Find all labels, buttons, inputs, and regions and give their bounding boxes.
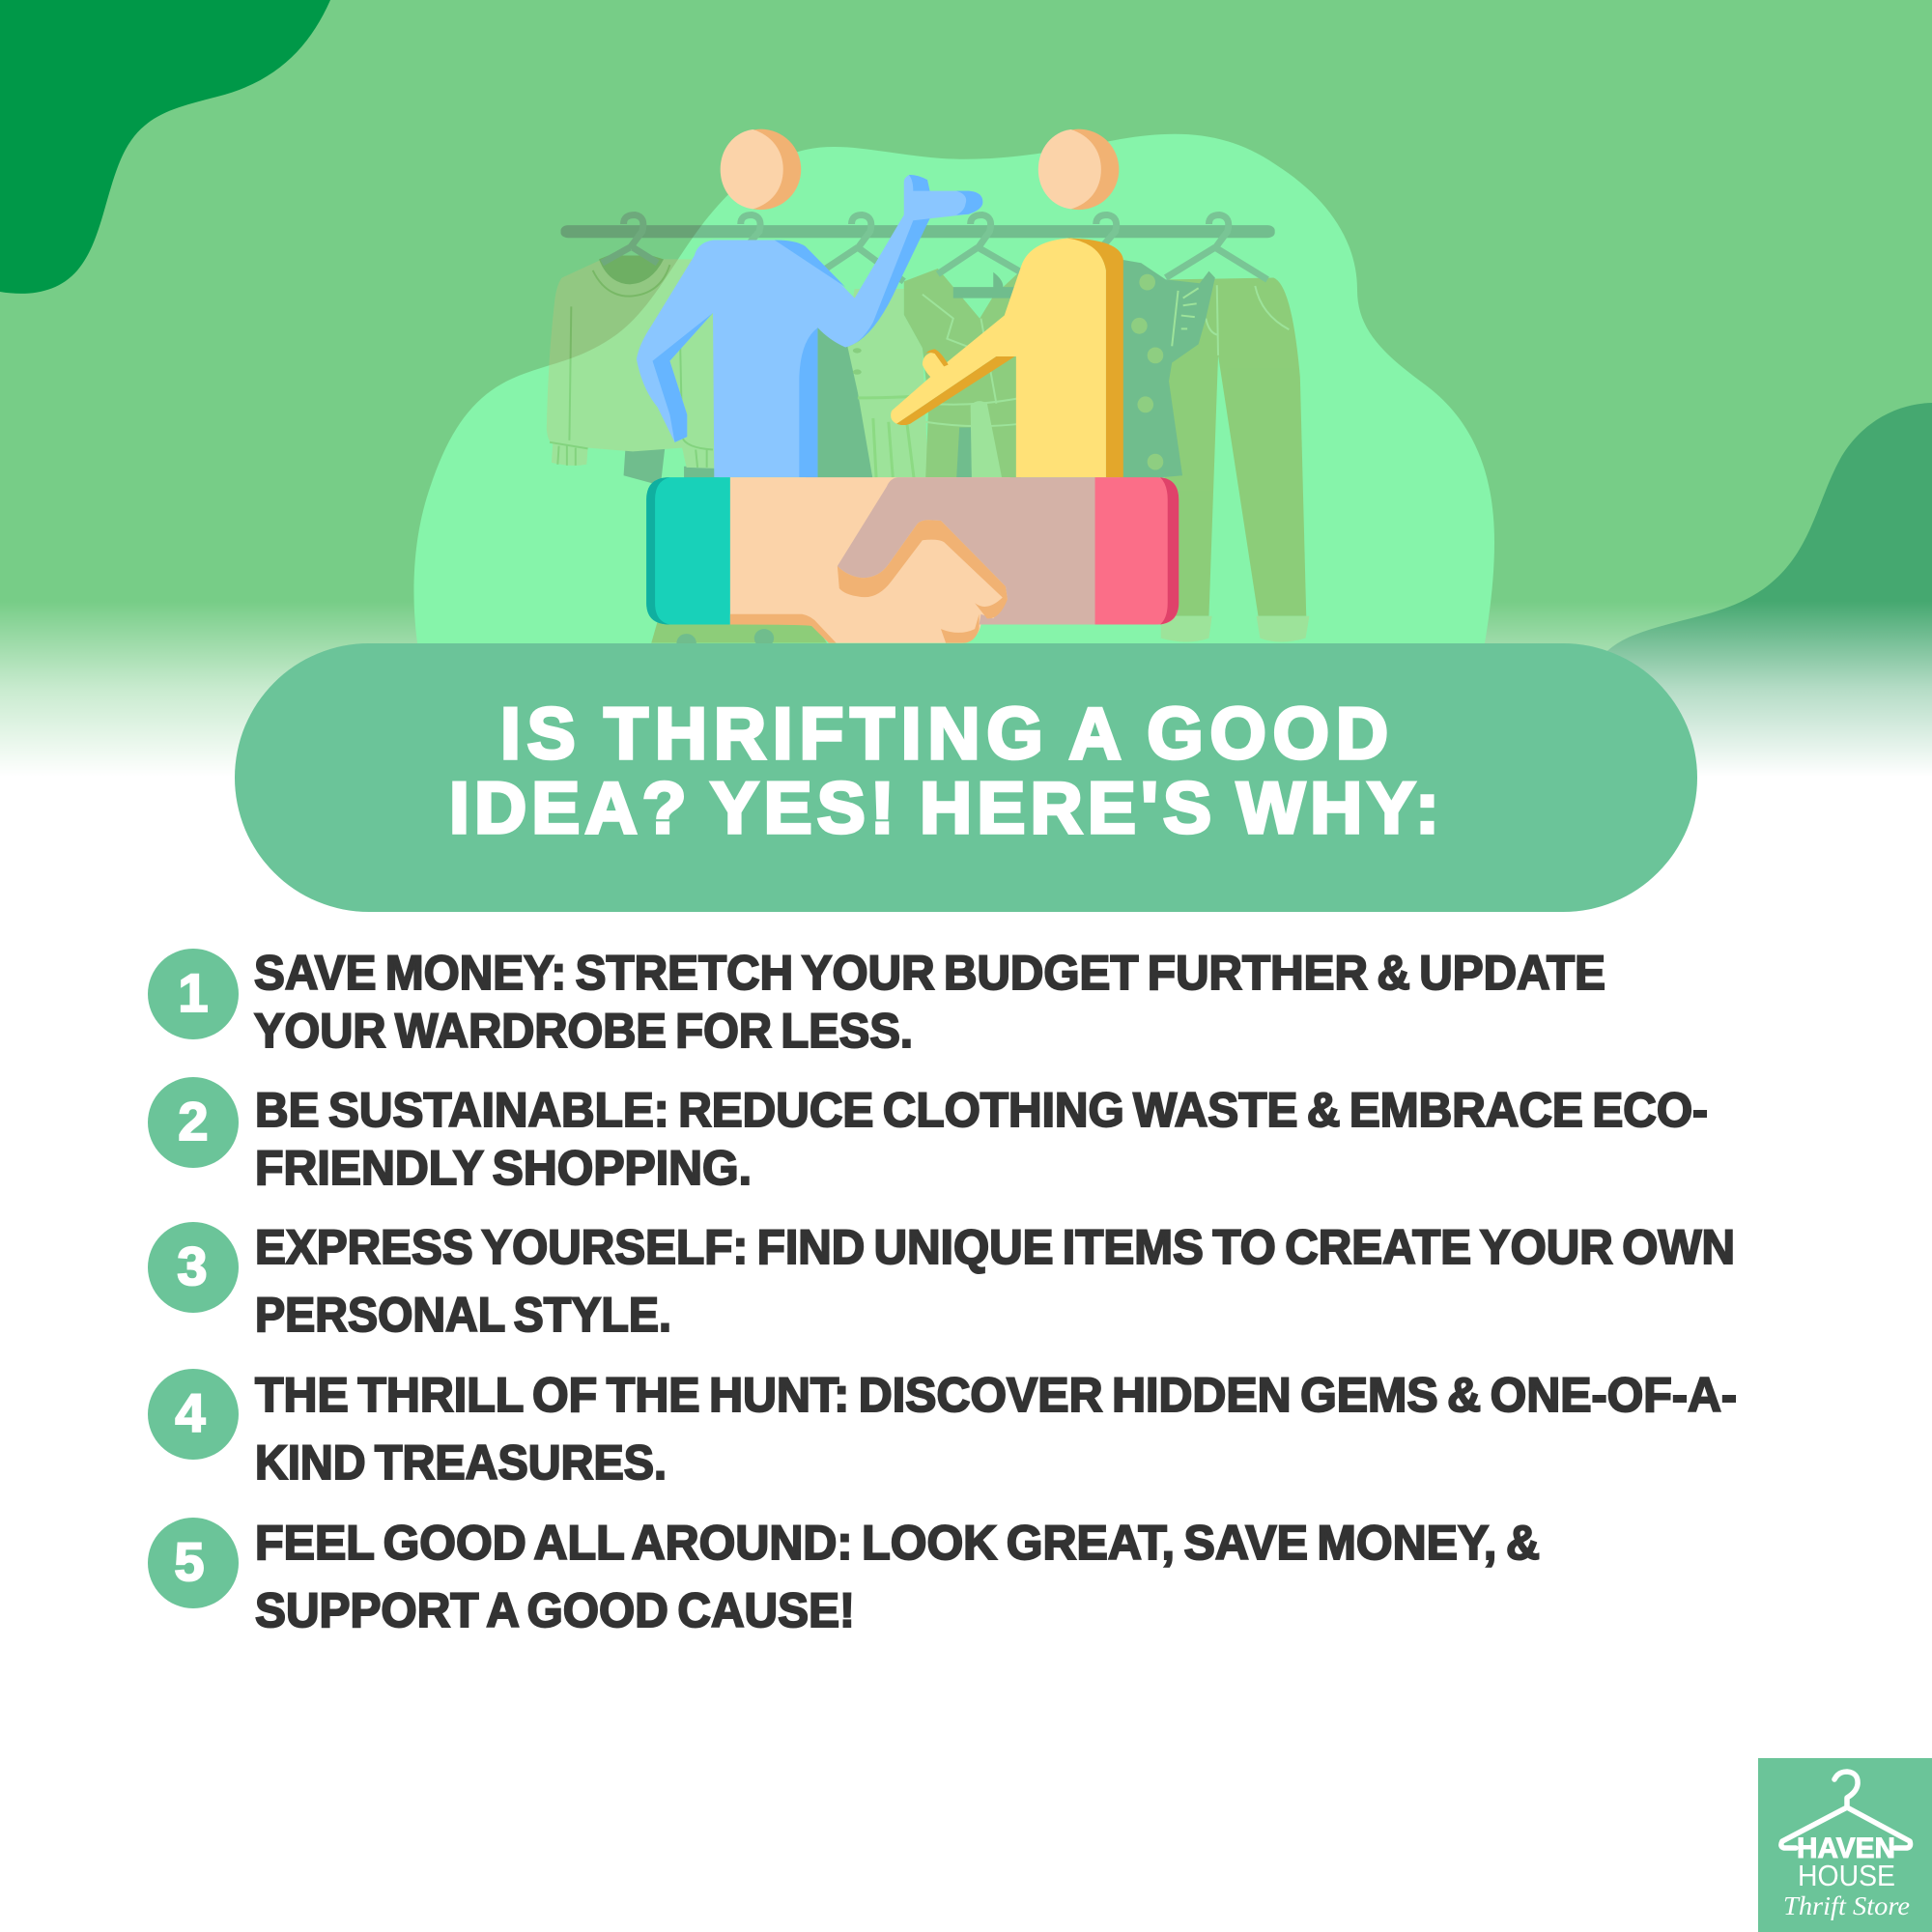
- logo: Haven House Thrift Store: Thrift Store: [1783, 1891, 1910, 1920]
- garment: dark dress: [806, 319, 873, 481]
- item 1 text: YOUR WARDROBE FOR LESS.: [254, 1004, 913, 1058]
- item 1: [148, 946, 1605, 1058]
- garment: bottom trousers: [651, 621, 827, 652]
- item 2 text: BE SUSTAINABLE: REDUCE CLOTHING WASTE & EMBRACE ECO-: [255, 1083, 1708, 1137]
- knuckle shading: [941, 614, 980, 643]
- skin hand: [730, 477, 1009, 643]
- item 4: [148, 1368, 1737, 1490]
- icon: handshake: [646, 477, 1179, 643]
- number badge 3: [148, 1222, 239, 1313]
- number badge 4: 4: [175, 1382, 206, 1443]
- person: yellow: [891, 129, 1123, 477]
- person: blue: [637, 129, 982, 477]
- illustration: people and handshake: [637, 129, 1179, 643]
- garment: trousers: [1159, 278, 1309, 641]
- garment: teal trousers under sweater: [624, 448, 719, 486]
- item 5: [148, 1516, 1540, 1637]
- item 3 text: PERSONAL STYLE.: [255, 1288, 671, 1342]
- title: [449, 693, 1439, 848]
- white fade overlay: [0, 601, 1932, 777]
- item 1 text: [254, 946, 1605, 1058]
- item 2 text: FRIENDLY SHOPPING.: [255, 1141, 752, 1195]
- item 4 text: KIND TREASURES.: [255, 1435, 667, 1490]
- number badge 1: 1: [178, 962, 209, 1023]
- item 1 text: SAVE MONEY: STRETCH YOUR BUDGET FURTHER & UPDATE: [254, 946, 1605, 1000]
- number badge 2: 2: [178, 1091, 209, 1151]
- item 3 text: [255, 1220, 1735, 1342]
- icon: hanger: [1781, 1772, 1911, 1848]
- left cuff: [646, 477, 730, 624]
- item 5 text: FEEL GOOD ALL AROUND: LOOK GREAT, SAVE MONEY, &: [255, 1516, 1540, 1570]
- number badge 4: [148, 1369, 239, 1460]
- item 4 text: THE THRILL OF THE HUNT: DISCOVER HIDDEN GEMS & ONE-OF-A-: [255, 1368, 1737, 1422]
- garment: sweater: [547, 256, 719, 469]
- title pill: [235, 643, 1697, 912]
- number badge 1: [148, 949, 239, 1039]
- item 3 text: EXPRESS YOURSELF: FIND UNIQUE ITEMS TO CREATE YOUR OWN: [255, 1220, 1735, 1274]
- logo wordmark: HAVEN: [1797, 1833, 1895, 1864]
- right cuff: [1094, 477, 1179, 624]
- number badge 5: 5: [174, 1531, 205, 1592]
- garment: blazer: [904, 269, 1021, 481]
- garment: pale dress: [845, 289, 928, 481]
- wrist shading: [730, 614, 837, 643]
- rack bar: [560, 225, 1275, 238]
- title: IDEA? YES! HERE'S WHY:: [449, 767, 1439, 848]
- number badge 5: [148, 1518, 239, 1608]
- item 5 text: SUPPORT A GOOD CAUSE!: [255, 1583, 855, 1637]
- number badge 3: 3: [177, 1236, 208, 1296]
- hangers: [602, 214, 1267, 281]
- item 5 text: [255, 1516, 1540, 1637]
- second hand: [838, 477, 1094, 624]
- decorative blob: top left: [0, 0, 330, 294]
- item 2 text: [255, 1083, 1708, 1195]
- thumb shading: [838, 520, 1008, 618]
- illustration: clothing rack: [547, 214, 1309, 652]
- logo: Haven House Thrift Store: [1758, 1758, 1932, 1932]
- item 4 text: [255, 1368, 1737, 1490]
- logo: Haven House Thrift Store: HOUSE: [1798, 1859, 1895, 1892]
- decorative blob: right: [1584, 403, 1932, 776]
- item 3: [148, 1220, 1735, 1342]
- garment: polka dot blouse: [1120, 259, 1215, 481]
- number badge 2: [148, 1077, 239, 1168]
- decorative blob: light green backdrop: [413, 134, 1494, 643]
- title: IS THRIFTING A GOOD: [500, 693, 1388, 774]
- item 2: [148, 1077, 1708, 1195]
